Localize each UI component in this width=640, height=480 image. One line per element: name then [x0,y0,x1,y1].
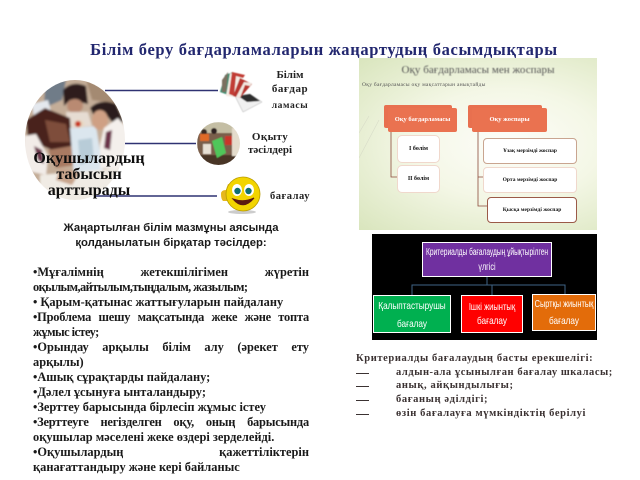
box: Орта мерзімді жоспар: Орта мерзімді жоспар [503,177,557,183]
icon: classroom photo [197,122,240,165]
box: Ұзақ мерзімді жоспар [483,138,577,164]
box: title purple: Критериалды бағалаудың ұйықтырілген [426,247,548,258]
label: Білім бағдарламасы: Білім [276,69,304,81]
box: internal summative red [461,295,523,333]
box: external summative orange: Сыртқы жиынтық [535,298,593,310]
box: Қысқа мерзімді жоспар [487,197,577,223]
list: methods: •Проблема шешу мақсатында жеке және топта [33,310,309,324]
heading: methods: қолданылатын бірқатар тәсілдер: [75,236,267,248]
list: methods: •Зерттеуге негізделген оқу, оның барысында [33,414,309,428]
list: methods: •Зерттеу барысында бірлесіп жұмыс істеу [33,400,266,414]
photo: students in oval [25,80,125,200]
title: Білім беру бағдарламаларын жаңартудың басымдықтары [90,40,558,59]
label: Оқыту тәсілдері [248,131,292,156]
slide connectors [359,116,487,206]
list: methods: •Орындау арқылы білім алу (әрекет ету [33,340,309,354]
list: methods: оқушылар мәселені жеке өздері зерделейді. [33,430,274,444]
list: methods: •Дәлел ұсынуға ынталандыру; [33,384,206,398]
label: Білім бағдарламасы [272,69,308,111]
list: methods: •Оқушылардың қажеттіліктерін [33,444,309,458]
box: formative green [373,295,451,333]
box: title purple [422,242,552,277]
text: criteria features: өзін бағалауға мүмкіндіктің берілуі [396,408,586,419]
box: І бөлім [397,135,440,163]
box: Қысқа мерзімді жоспар: Қысқа мерзімді жоспар [503,207,561,213]
text: criteria features [356,353,613,419]
box: Орта мерзімді жоспар [483,167,577,193]
icon: smiley thumbs up [221,176,260,214]
connector lines [96,90,218,197]
chart connectors [412,277,566,295]
box: І бөлім: І бөлім [409,146,428,152]
text: main caption [33,150,145,199]
text: main caption: Оқушылардың [33,150,145,166]
list: methods [33,265,309,474]
list: methods: арқылы) [33,355,84,369]
text: criteria features: алдын-ала ұсынылған бағалау шкаласы; [396,367,613,378]
list: methods: •Ашық сұрақтарды пайдалану; [33,370,210,384]
list: methods: қанағаттандыру және кері байланыс [33,460,240,474]
label: бағалау: бағалау [270,191,310,202]
text: criteria features: анық, айқындылығы; [396,380,514,391]
heading: methods: Жаңартылған білім мазмұны аясында [63,222,279,234]
panel: curriculum slide [359,58,597,230]
box: formative green: бағалау [397,318,427,330]
slide heading: Оқу бағдарламасы мен жоспары [401,64,555,76]
box: external summative orange: бағалау [549,315,579,327]
icon: books [219,71,262,112]
panel: curriculum slide: Оқу жоспары [489,116,530,123]
text: main caption: табысын [56,166,122,183]
label: Білім бағдарламасы: бағдар [272,83,308,95]
label: Білім бағдарламасы: ламасы [272,101,308,111]
box: title purple: үлгісі [478,262,496,273]
box: internal summative red: Ішкі жиынтық [469,301,515,313]
slide subheading: Оқу бағдарламасы оқу мақсаттарын анықтайды [362,82,486,88]
box: Оқу бағдарламасы [384,105,452,128]
list: methods: • Қарым-қатынас жаттығуларын пайдалану [33,294,283,308]
text: main caption: арттырады [48,182,130,199]
diagram: student success [25,69,310,214]
panel: criteria assessment chart [372,234,597,340]
label: Оқыту тәсілдері: тәсілдері [248,144,292,156]
panel: curriculum slide: Оқу бағдарламасы [395,116,450,123]
text: criteria features: бағаның әділдігі; [396,394,488,405]
label: Оқыту тәсілдері: Оқыту [252,131,288,143]
box: external summative orange [532,294,596,331]
box: ІІ бөлім: ІІ бөлім [408,176,429,182]
text: criteria features: Критериалды бағалаудың басты ерекшелігі: [356,353,593,364]
list: methods: оқылым,айтылым,тыңдалым, жазылым; [33,280,247,294]
list: methods: жұмыс істеу; [33,325,99,339]
list: methods: •Мұғалімнің жетекшілігімен жүретін [33,265,309,279]
box: ІІ бөлім [397,165,440,193]
box: internal summative red: бағалау [477,315,507,327]
box: formative green: Қалыптастырушы [378,300,446,312]
box: Оқу жоспары [468,105,542,128]
box: Ұзақ мерзімді жоспар: Ұзақ мерзімді жоспар [503,148,557,154]
heading: methods [63,222,279,248]
